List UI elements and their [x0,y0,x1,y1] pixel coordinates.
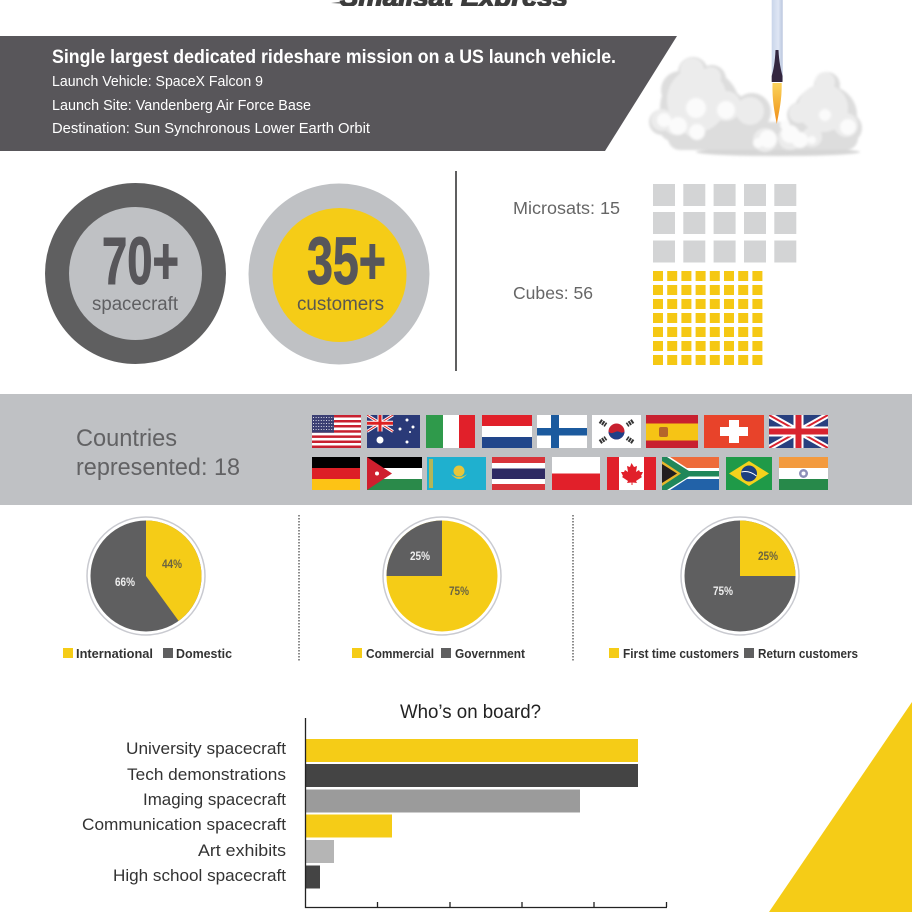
pie chart: first time vs return customers [681,517,799,635]
bar labels: Imaging spacecraft [143,790,286,809]
chart heading: Who’s on board? [400,702,541,723]
flag: Brazil [726,457,772,490]
panel: countries band [0,394,912,505]
bars [306,739,638,888]
label: cubes: Cubes: 56 [513,283,593,303]
pie chart: international vs domestic: 66% [115,575,135,589]
countries text [76,425,240,481]
flag: South Korea [592,415,641,448]
launch details: Launch Site: Vandenberg Air Force Base [52,98,311,114]
bar labels: High school spacecraft [113,866,286,885]
icon grid: 56 cubes [653,271,762,365]
flame [772,83,782,124]
flags [312,415,828,490]
flag: Spain [646,415,698,448]
bar labels [82,739,286,885]
flag: Poland [552,457,600,490]
pie chart: first time vs return customers: 75% [713,584,733,598]
axes [306,718,667,908]
launch details: Launch Vehicle: SpaceX Falcon 9 [52,74,263,90]
banner heading: Single largest dedicated rideshare mission on a US launch vehicle. [52,47,616,68]
legend: commercial, government: Government [455,646,526,661]
legend: first time, return customers: First time customers [623,646,739,661]
flag: South Africa [662,457,719,490]
flag: Kazakhstan [427,457,486,490]
stat: customers: customers [297,294,384,315]
flag: Finland [537,415,587,448]
flag: Jordan [367,457,422,490]
pie chart: commercial vs government: 75% [449,584,469,598]
icon grid: 15 microsats [653,184,796,262]
legend: international, domestic: Domestic [176,646,232,661]
legend: first time, return customers: Return customers [758,646,858,661]
flag: Switzerland [704,415,764,448]
flag: Canada [607,457,656,490]
legend: international, domestic: International [76,646,153,661]
pie chart: commercial vs government: 25% [410,549,430,563]
smoke cloud [649,57,862,156]
flag: India [779,457,828,490]
legend: first time, return customers [609,646,858,661]
countries text: represented: 18 [76,454,240,481]
launch details: Destination: Sun Synchronous Lower Earth Orbit [52,121,370,137]
decorative corner triangle [769,702,912,912]
stat: customers: 35+ [307,224,386,299]
legend: commercial, government [352,646,526,661]
icon: rocket launch with smoke [649,0,862,156]
flag: USA [312,415,361,448]
pie chart: first time vs return customers: 25% [758,549,778,563]
flag: United Kingdom [769,415,828,448]
stat: spacecraft: spacecraft [92,294,179,315]
bar labels: University spacecraft [126,739,286,758]
flag: Thailand [492,457,545,490]
legend: international, domestic [63,646,232,661]
flag: Australia [367,415,420,448]
bar labels: Art exhibits [198,841,286,860]
flag: Germany [312,457,360,490]
flag: Italy [426,415,475,448]
stat: spacecraft: 70+ [102,224,179,299]
stat: customers [248,184,430,364]
legend: commercial, government: Commercial [366,646,434,661]
countries text: Countries [76,425,177,452]
bar labels: Tech demonstrations [127,765,286,784]
panel: mission banner [0,36,677,151]
flag: Netherlands [482,415,532,448]
pie chart: commercial vs government [383,517,501,635]
stat: spacecraft [45,183,226,364]
launch details [52,74,370,137]
bar labels: Communication spacecraft [82,815,286,834]
pie chart: international vs domestic: 44% [162,557,182,571]
title [331,0,567,6]
rocket body [772,0,783,81]
bar chart: who's on board [82,718,667,908]
label: microsats: Microsats: 15 [513,198,620,218]
pie chart: international vs domestic [87,517,205,635]
